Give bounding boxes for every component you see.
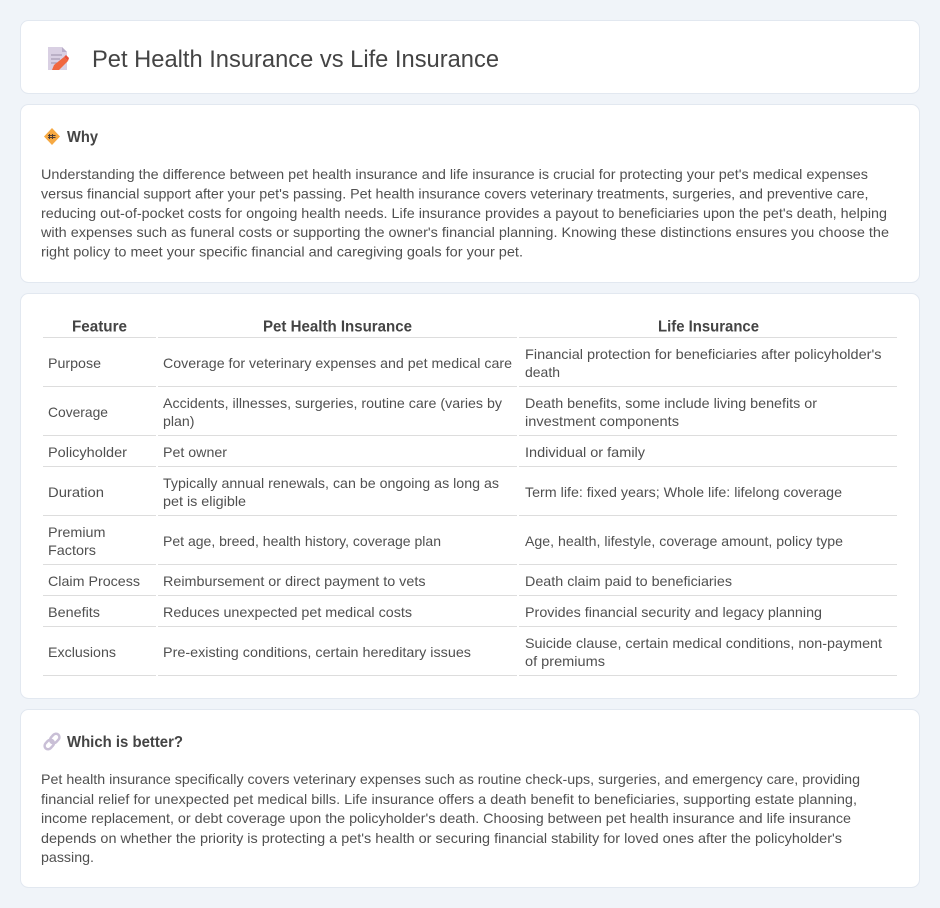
- row: duration: Duration: [48, 484, 104, 500]
- text block: why paragraph: [40, 166, 889, 260]
- row: exclusions: Pre-existing conditions, certain hereditary issues: [163, 644, 471, 660]
- row: premium factors: Premium: [48, 524, 106, 540]
- table header row: [72, 318, 759, 336]
- row: claim process: [48, 573, 732, 589]
- text block: which is better paragraph: depends on whether the priority is protecting a pet's health or securing financial stability for loved ones after the policyholder's: [41, 830, 842, 846]
- row: coverage: [48, 395, 817, 429]
- heading: why: Why: [67, 129, 98, 146]
- row: coverage: Death benefits, some include living benefits or: [525, 395, 817, 411]
- panel: which is better: [20, 710, 920, 888]
- row: policyholder: Policyholder: [48, 444, 127, 460]
- row: premium factors: Factors: [48, 542, 96, 558]
- text block: why paragraph: versus financial support after your pet's passing. Pet health insurance covers veterinary treatments, surgeries, and preventive care,: [41, 186, 868, 202]
- row: duration: Typically annual renewals, can be ongoing as long as: [163, 475, 499, 491]
- row: claim process: Claim Process: [48, 573, 140, 589]
- row: exclusions: [48, 635, 882, 669]
- row: exclusions: of premiums: [525, 653, 605, 669]
- text block: why paragraph: Understanding the difference between pet health insurance and life insurance is crucial for protecting your pet's medical expenses: [41, 166, 868, 182]
- title: Pet Health Insurance vs Life Insurance: [92, 46, 499, 73]
- row: coverage: investment components: [525, 413, 679, 429]
- text block: which is better paragraph: [41, 771, 860, 865]
- row: duration: [48, 475, 842, 509]
- table header row: Life Insurance: [658, 318, 759, 336]
- icon: chain link: [43, 732, 61, 751]
- row: purpose: death: [525, 364, 560, 380]
- row: exclusions: Exclusions: [48, 644, 116, 660]
- text block: why paragraph: with expenses such as funeral costs or supporting the owner's financial planning. Knowing these distinctions ensures you choose the: [40, 224, 889, 240]
- row: benefits: Benefits: [48, 604, 100, 620]
- row: coverage: Accidents, illnesses, surgeries, routine care (varies by: [163, 395, 502, 411]
- text block: which is better paragraph: Pet health insurance specifically covers veterinary expenses such as routine check-ups, surgeries, and emergency care, providing: [41, 771, 860, 787]
- row: purpose: Purpose: [48, 355, 101, 371]
- row: benefits: [48, 604, 822, 620]
- icon: memo with pencil: [48, 47, 69, 70]
- row: benefits: Provides financial security and legacy planning: [525, 604, 822, 620]
- row: purpose: Coverage for veterinary expenses and pet medical care: [163, 355, 512, 371]
- row: duration: Term life: fixed years; Whole life: lifelong coverage: [525, 484, 842, 500]
- row: exclusions: Suicide clause, certain medical conditions, non-payment: [525, 635, 882, 651]
- row: claim process: Death claim paid to beneficiaries: [525, 573, 732, 589]
- row: premium factors: Pet age, breed, health history, coverage plan: [163, 533, 441, 549]
- row: purpose: [48, 346, 882, 380]
- panel: title header: [20, 20, 920, 94]
- icon: orange diamond sign: [44, 128, 60, 145]
- row: purpose: Financial protection for beneficiaries after policyholder's: [525, 346, 882, 362]
- row: duration: pet is eligible: [163, 493, 246, 509]
- row: policyholder: [48, 444, 645, 460]
- row: policyholder: Individual or family: [525, 444, 645, 460]
- panel: why: [20, 104, 920, 282]
- row: coverage: Coverage: [48, 404, 108, 420]
- row: policyholder: Pet owner: [163, 444, 227, 460]
- row: claim process: Reimbursement or direct payment to vets: [163, 573, 426, 589]
- heading: which is better: Which is better?: [67, 734, 183, 751]
- table header row: Feature: [72, 318, 127, 336]
- text block: which is better paragraph: passing.: [41, 849, 94, 865]
- text block: which is better paragraph: financial relief for unexpected pet medical bills. Life insurance offers a death benefit to beneficiaries, supporting estate planning,: [41, 791, 857, 807]
- table header row: Pet Health Insurance: [263, 318, 412, 336]
- text block: why paragraph: right policy to meet your specific financial and caregiving goals for your pet.: [41, 244, 523, 260]
- text block: which is better paragraph: income replacement, or debt coverage upon the policyholder's death. Choosing between pet health insurance and life insurance: [41, 810, 851, 826]
- row: benefits: Reduces unexpected pet medical costs: [163, 604, 412, 620]
- row: coverage: plan): [163, 413, 194, 429]
- panel: comparison table: [20, 294, 920, 698]
- text block: why paragraph: reducing out-of-pocket costs for ongoing health needs. Life insurance provides a payout to beneficiaries upon the pet's death, helping: [41, 205, 887, 221]
- row: premium factors: [48, 524, 843, 558]
- row: premium factors: Age, health, lifestyle, coverage amount, policy type: [525, 533, 843, 549]
